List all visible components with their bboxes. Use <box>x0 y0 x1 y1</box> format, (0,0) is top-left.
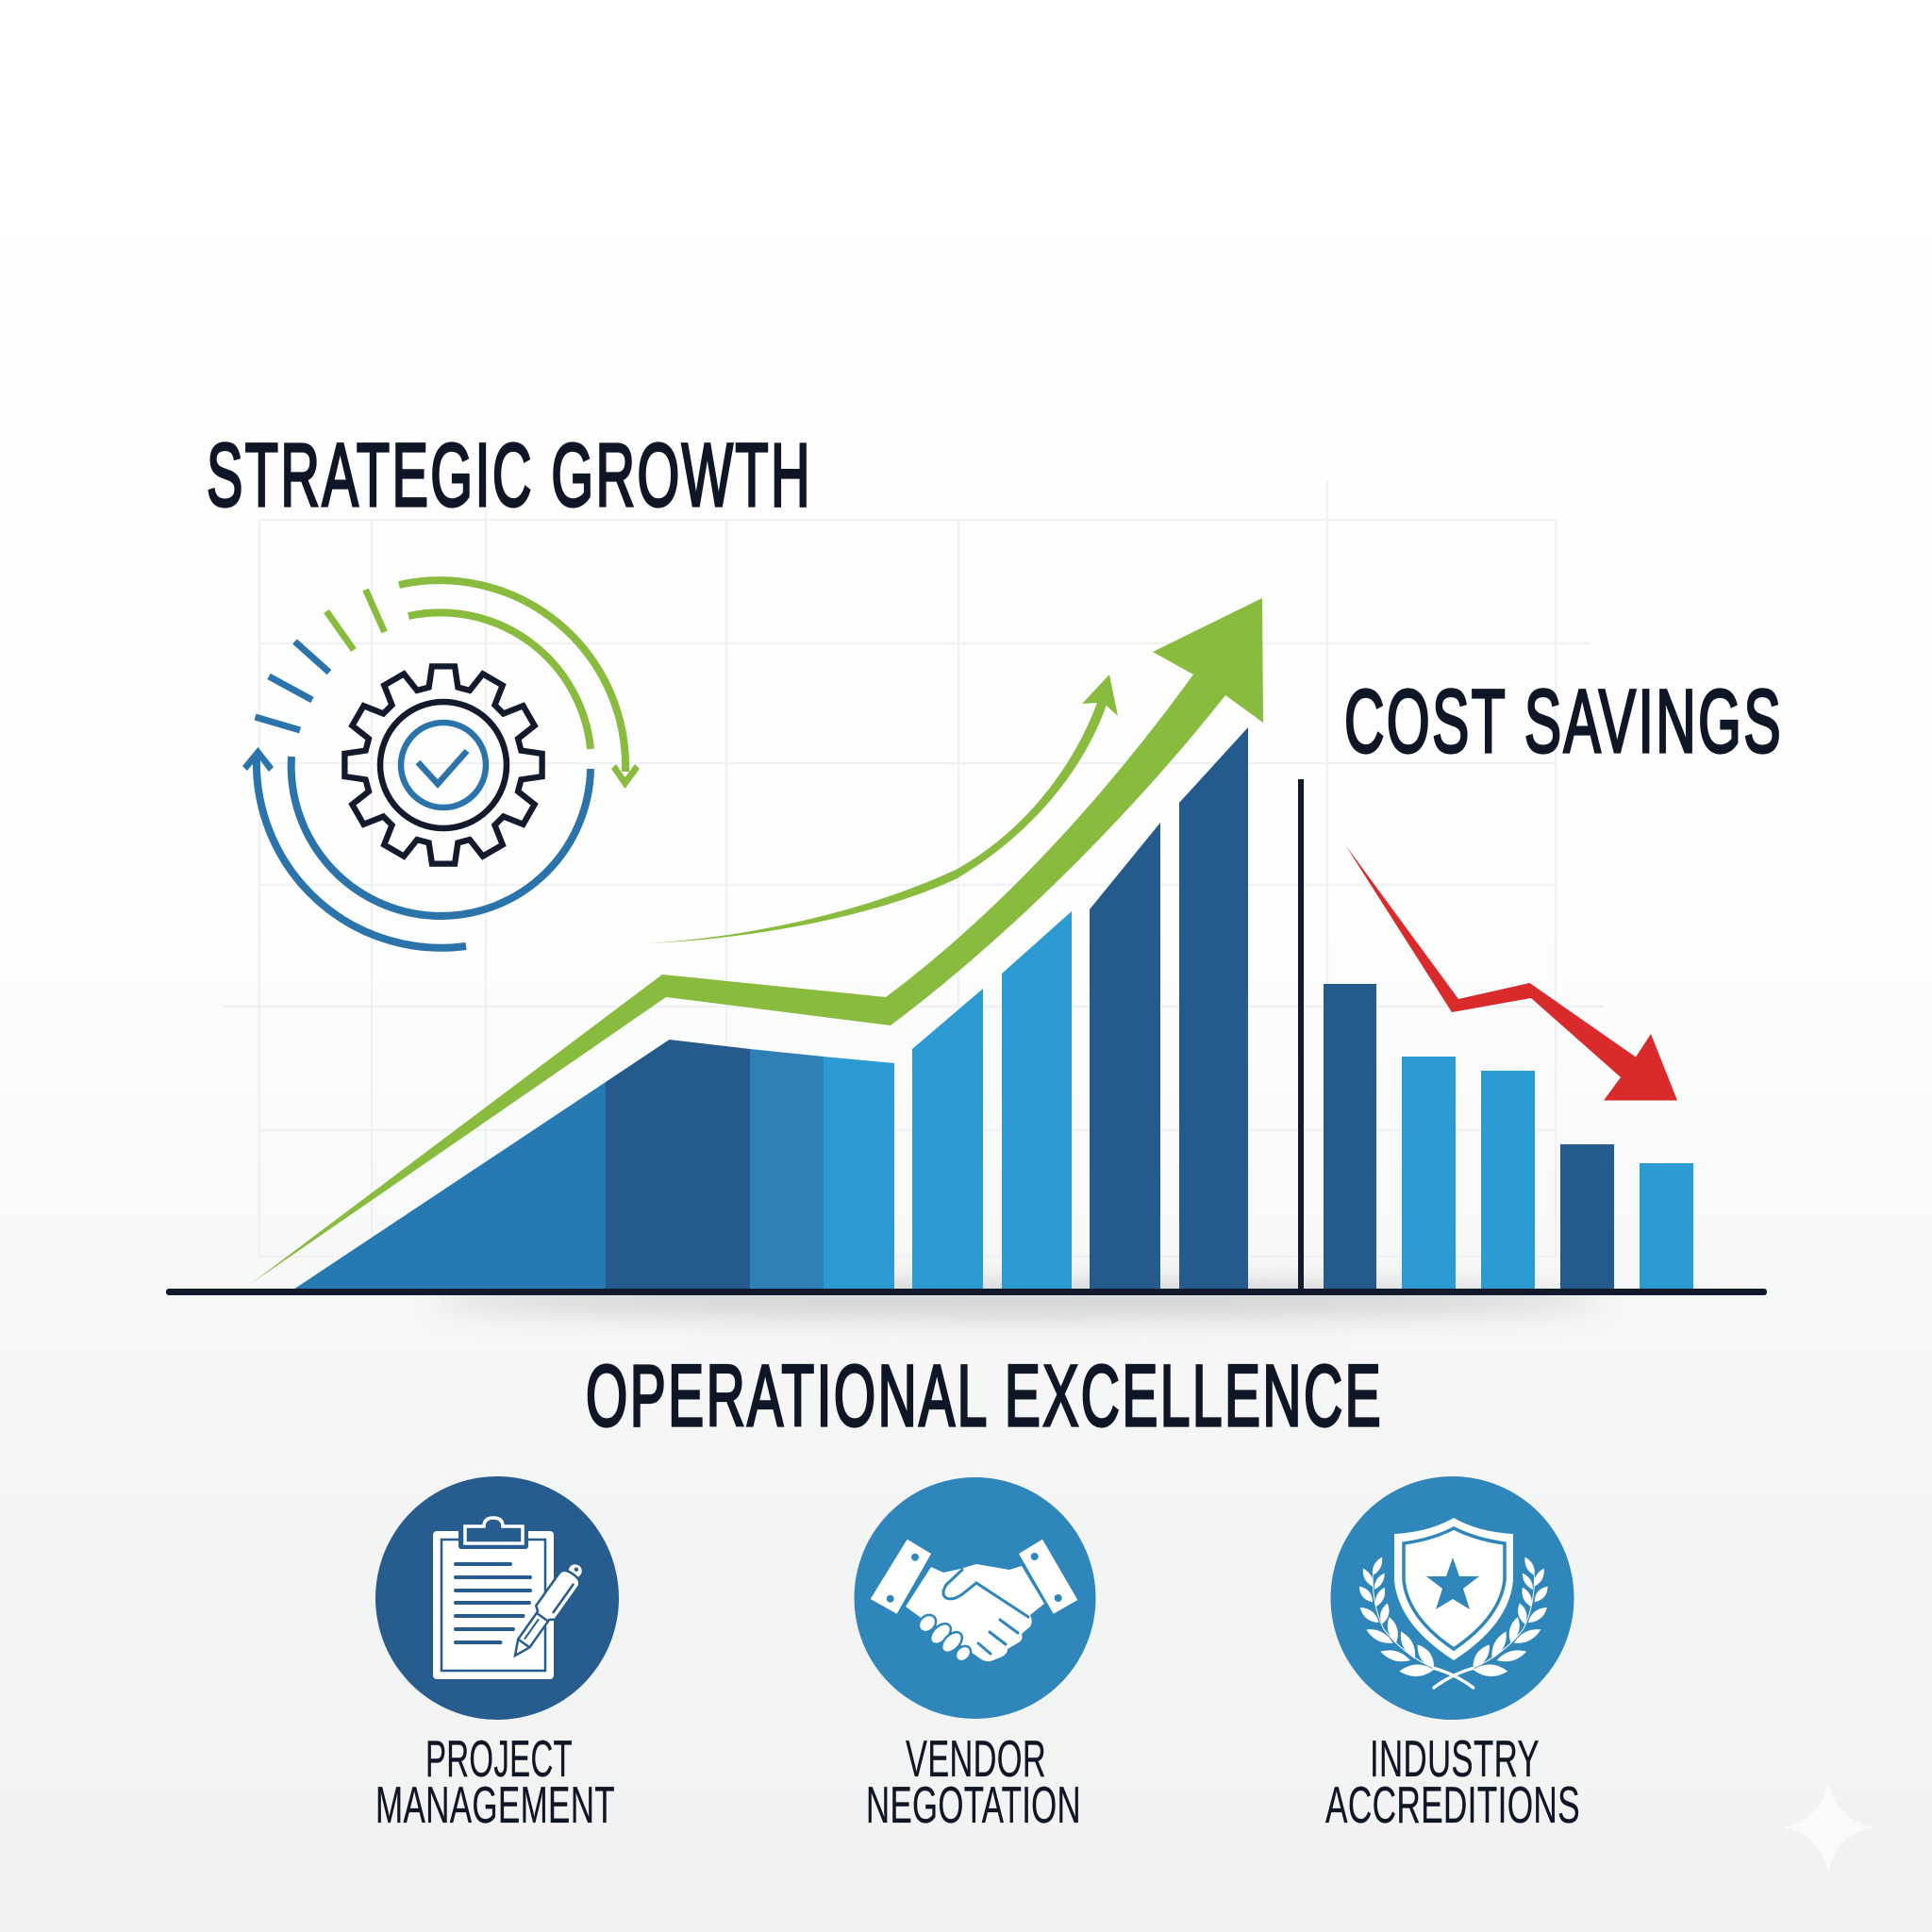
axis shadow <box>434 1283 1604 1317</box>
icon: clipboard <box>375 1476 619 1720</box>
arrow: red downward arrow <box>1345 845 1677 1100</box>
icon: handshake <box>855 1477 1096 1719</box>
arrow: main green growth arrow <box>252 598 1263 1283</box>
chart: cost savings bars <box>1324 984 1693 1290</box>
left laurel <box>1359 1557 1474 1688</box>
label <box>375 1729 615 1834</box>
icon: gear with cycle arrows <box>242 580 640 948</box>
label: ACCREDITIONS <box>1325 1775 1580 1834</box>
icon: sparkle watermark <box>1781 1781 1875 1874</box>
chart: growth bars <box>293 727 1248 1290</box>
arrow: thin green growth arrow <box>648 675 1118 943</box>
item: vendor negotation <box>855 1477 1096 1834</box>
label: NEGOTATION <box>866 1775 1081 1834</box>
tick marks <box>255 590 385 730</box>
gear <box>344 666 542 864</box>
green outer arc arrow <box>399 580 640 789</box>
icon: shield with laurels <box>1330 1476 1574 1720</box>
label: VENDOR <box>906 1729 1046 1788</box>
pen <box>506 1558 589 1662</box>
title: operational excellence: OPERATIONAL EXCELLENCE <box>586 1348 1383 1444</box>
divider line <box>1298 779 1304 1291</box>
blue outer arc arrow <box>242 747 591 948</box>
right laurel <box>1434 1557 1548 1688</box>
label <box>1325 1729 1580 1834</box>
label: MANAGEMENT <box>375 1775 615 1834</box>
title: strategic growth: STRATEGIC GROWTH <box>207 425 812 525</box>
label <box>866 1729 1081 1834</box>
axis baseline <box>166 1289 1767 1295</box>
item: industry accreditions <box>1325 1476 1580 1834</box>
label: INDUSTRY <box>1370 1729 1540 1788</box>
item: project management <box>375 1476 619 1834</box>
star <box>1426 1557 1479 1609</box>
label: PROJECT <box>425 1729 573 1788</box>
